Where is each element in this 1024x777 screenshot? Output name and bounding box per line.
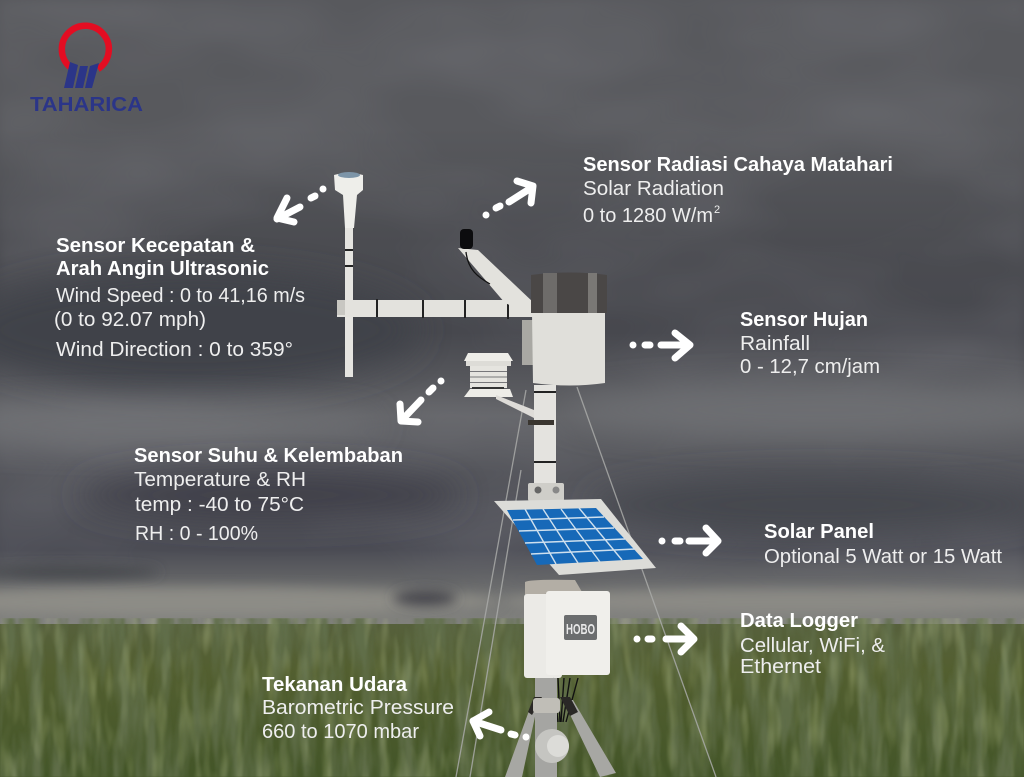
data logger box: HOBO (566, 621, 595, 638)
horizontal arm (337, 299, 537, 319)
logo stripes (64, 62, 99, 88)
arrow: rain gauge (630, 333, 690, 358)
text: Solar Panel: Solar Panel (764, 520, 874, 543)
logo wordmark: TAHARICA (30, 94, 143, 116)
text: Sensor Suhu & Kelembaban: Sensor Suhu & Kelembaban (134, 444, 403, 467)
guy wires (456, 387, 716, 777)
text: Sensor Kecepatan & Arah Angin Ultrasonic (54, 234, 305, 361)
text: Sensor Kecepatan & Arah Angin Ultrasonic: Arah Angin Ultrasonic (56, 257, 269, 280)
text: Data Logger: Ethernet (740, 655, 821, 678)
text: Data Logger (740, 609, 885, 678)
text: Data Logger: Data Logger (740, 609, 858, 632)
logo: Taharica (30, 26, 143, 116)
solar panel (494, 499, 656, 575)
arrow: solar radiation (484, 181, 533, 218)
text: Sensor Radiasi Cahaya Matahari: Solar Radiation (583, 177, 724, 200)
text: Tekanan Udara (262, 673, 454, 743)
text: Sensor Radiasi Cahaya Matahari: 2 (714, 204, 720, 216)
text: Sensor Hujan: Sensor Hujan (740, 308, 868, 331)
arrow: anemometer (277, 186, 326, 222)
arrow: solar panel (660, 528, 718, 553)
text: Sensor Suhu & Kelembaban (134, 444, 403, 545)
text: Tekanan Udara: Tekanan Udara (262, 673, 408, 696)
anemometer sensor (334, 172, 363, 377)
text: Tekanan Udara: Barometric Pressure (262, 696, 454, 719)
text: Solar Panel: Optional 5 Watt or 15 Watt (764, 545, 1002, 568)
text: Sensor Kecepatan & Arah Angin Ultrasonic: Wind Speed : 0 to 41,16 m/s (56, 284, 305, 307)
text: Sensor Kecepatan & Arah Angin Ultrasonic: Wind Direction : 0 to 359° (56, 338, 293, 361)
arrow: temperature sensor (400, 378, 444, 422)
data logger box (524, 580, 610, 722)
text: Sensor Radiasi Cahaya Matahari: Sensor Radiasi Cahaya Matahari (583, 153, 893, 176)
temperature and humidity shield (464, 353, 534, 418)
text: Sensor Kecepatan & Arah Angin Ultrasonic: Sensor Kecepatan & (56, 234, 255, 257)
text: Sensor Suhu & Kelembaban: temp : -40 to 75°C (135, 493, 304, 516)
text: Solar Panel (764, 520, 1002, 568)
background: wheat field (0, 618, 1024, 777)
arrow: data logger (634, 626, 694, 652)
text: Tekanan Udara: 660 to 1070 mbar (262, 720, 419, 743)
text: Sensor Radiasi Cahaya Matahari (583, 153, 893, 227)
text: Sensor Hujan (740, 308, 880, 378)
text: Sensor Suhu & Kelembaban: RH : 0 - 100% (135, 522, 258, 545)
text: Sensor Suhu & Kelembaban: Temperature & RH (134, 468, 306, 491)
text: Sensor Hujan: 0 - 12,7 cm/jam (740, 355, 880, 378)
solar radiation sensor and diagonal arm (458, 229, 534, 316)
logo ring (62, 26, 109, 69)
text: Sensor Hujan: Rainfall (740, 332, 810, 355)
text: Data Logger: Cellular, WiFi, & (740, 634, 885, 657)
text: Sensor Kecepatan & Arah Angin Ultrasonic: (0 to 92.07 mph) (54, 308, 206, 331)
text: Sensor Radiasi Cahaya Matahari: 0 to 1280 W/m (583, 204, 713, 227)
rain gauge and enclosure (522, 272, 607, 386)
tripod and barometric sensor (505, 678, 616, 777)
weather station mast (528, 385, 564, 505)
arrow: barometric sensor (473, 712, 528, 740)
